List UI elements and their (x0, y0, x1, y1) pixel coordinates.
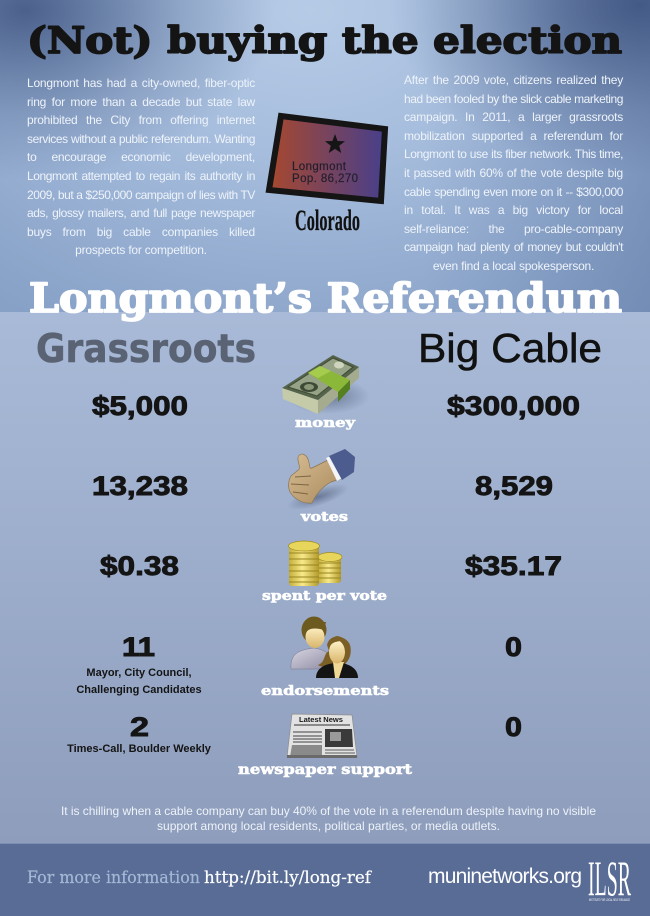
heading: Longmont's Referendum: Longmont’s Referendum (29, 275, 622, 322)
value: newspapers big cable: 0 (505, 712, 522, 742)
text block: left intro column: ads, glossy mailers, and full page newspaper (27, 206, 255, 220)
map: Colorado (269, 116, 385, 237)
text block: left intro column: 2009, but a $250,000 campaign of lies with TV (27, 188, 255, 202)
caption: endorsers: Mayor, City Council, (86, 667, 192, 679)
label: money: money (295, 416, 356, 431)
text block: right intro column: mobilization supported a referendum for (404, 129, 623, 143)
icon: newspaper (287, 714, 357, 758)
state name: Colorado (295, 204, 360, 237)
text block: left intro column: buys from big cable companies killed (27, 225, 255, 239)
caption: newspapers: Times-Call, Boulder Weekly (67, 743, 212, 755)
closing line two: support among local residents, political parties, or media outlets. (157, 819, 500, 833)
closing line one: It is chilling when a cable company can buy 40% of the vote in a referendum despite having no visible (61, 804, 596, 818)
label: newspaper support: newspaper support (238, 762, 413, 778)
footer link: http://bit.ly/long-ref (204, 868, 373, 888)
background: top section (0, 0, 650, 312)
text block: left intro column: Longmont attempted to regain its authority in (27, 169, 255, 183)
grassroots values (92, 391, 188, 742)
state outline (269, 116, 385, 201)
background: top vignette (0, 0, 650, 312)
background: comparison section (0, 312, 650, 843)
text block: left intro column (27, 76, 256, 257)
text block: right intro column: even find a local spokesperson. (433, 259, 594, 273)
text block: right intro column (404, 73, 624, 273)
text block: left intro column: prohibited the City from offering internet (27, 113, 255, 127)
map label: Longmont (292, 161, 347, 173)
icon: stack of money (282, 355, 370, 414)
value: endorsements big cable: 0 (505, 632, 522, 662)
text block: right intro column: in total. It was a big victory for local (404, 203, 623, 217)
value: money grassroots: $5,000 (92, 391, 188, 421)
icon: people (291, 616, 358, 678)
text block: right intro column: After the 2009 vote, citizens realized they (404, 73, 623, 87)
title: (Not) buying the election (27, 20, 622, 62)
footer: website: muninetworks.org (428, 865, 582, 888)
column heading: Grassroots: Grassroots (36, 327, 256, 372)
big cable values (447, 391, 580, 742)
text block: right intro column: Longmont to use its fiber network. This time, (404, 147, 623, 161)
text block: right intro column: self-reliance: the pro-cable-company (404, 222, 623, 236)
icon: thumbs up (285, 449, 355, 515)
value: per vote grassroots: $0.38 (100, 551, 179, 581)
closing statement (61, 804, 596, 833)
icon: gold coins (288, 541, 342, 586)
text block: left intro column: ring for more than a decade but state law (27, 95, 255, 109)
footer: more information (27, 868, 373, 888)
text block: left intro column: to encourage economic development, (27, 150, 255, 164)
value: newspapers grassroots: 2 (130, 712, 149, 742)
logo: ILSR (588, 850, 631, 906)
label: votes: votes (300, 510, 348, 525)
text block: left intro column: prospects for competition. (75, 243, 207, 257)
footer label: For more information (27, 868, 200, 888)
background: footer band (0, 843, 650, 916)
caption: endorsers: Challenging Candidates (76, 684, 202, 696)
text block: right intro column: it passed with 60% of the vote despite big (404, 166, 623, 180)
value: endorsements grassroots: 11 (122, 632, 155, 662)
text block: left intro column: services without a public referendum. Wanting (27, 132, 255, 146)
value: votes big cable: 8,529 (475, 471, 553, 501)
text block: right intro column: had been fooled by the slick cable marketing (404, 92, 623, 106)
label: spent per vote: spent per vote (262, 589, 387, 604)
column heading: Big Cable: Big Cable (418, 325, 602, 371)
text block: right intro column: campaign had plenty of money but couldn't (404, 240, 623, 254)
icon: capital star (325, 134, 345, 153)
value: per vote big cable: $35.17 (465, 551, 562, 581)
text block: left intro column: Longmont has had a city-owned, fiber-optic (27, 76, 255, 90)
text block: right intro column: campaign. In 2011, a larger grassroots (404, 110, 623, 124)
text block: right intro column: cable spending even more on it -- $300,000 (404, 185, 623, 199)
map label: Pop. 86,270 (292, 173, 358, 185)
value: votes grassroots: 13,238 (92, 471, 188, 501)
value: money big cable: $300,000 (447, 391, 580, 421)
label: endorsements: endorsements (261, 684, 389, 699)
icon: newspaper: Latest News (299, 715, 343, 724)
